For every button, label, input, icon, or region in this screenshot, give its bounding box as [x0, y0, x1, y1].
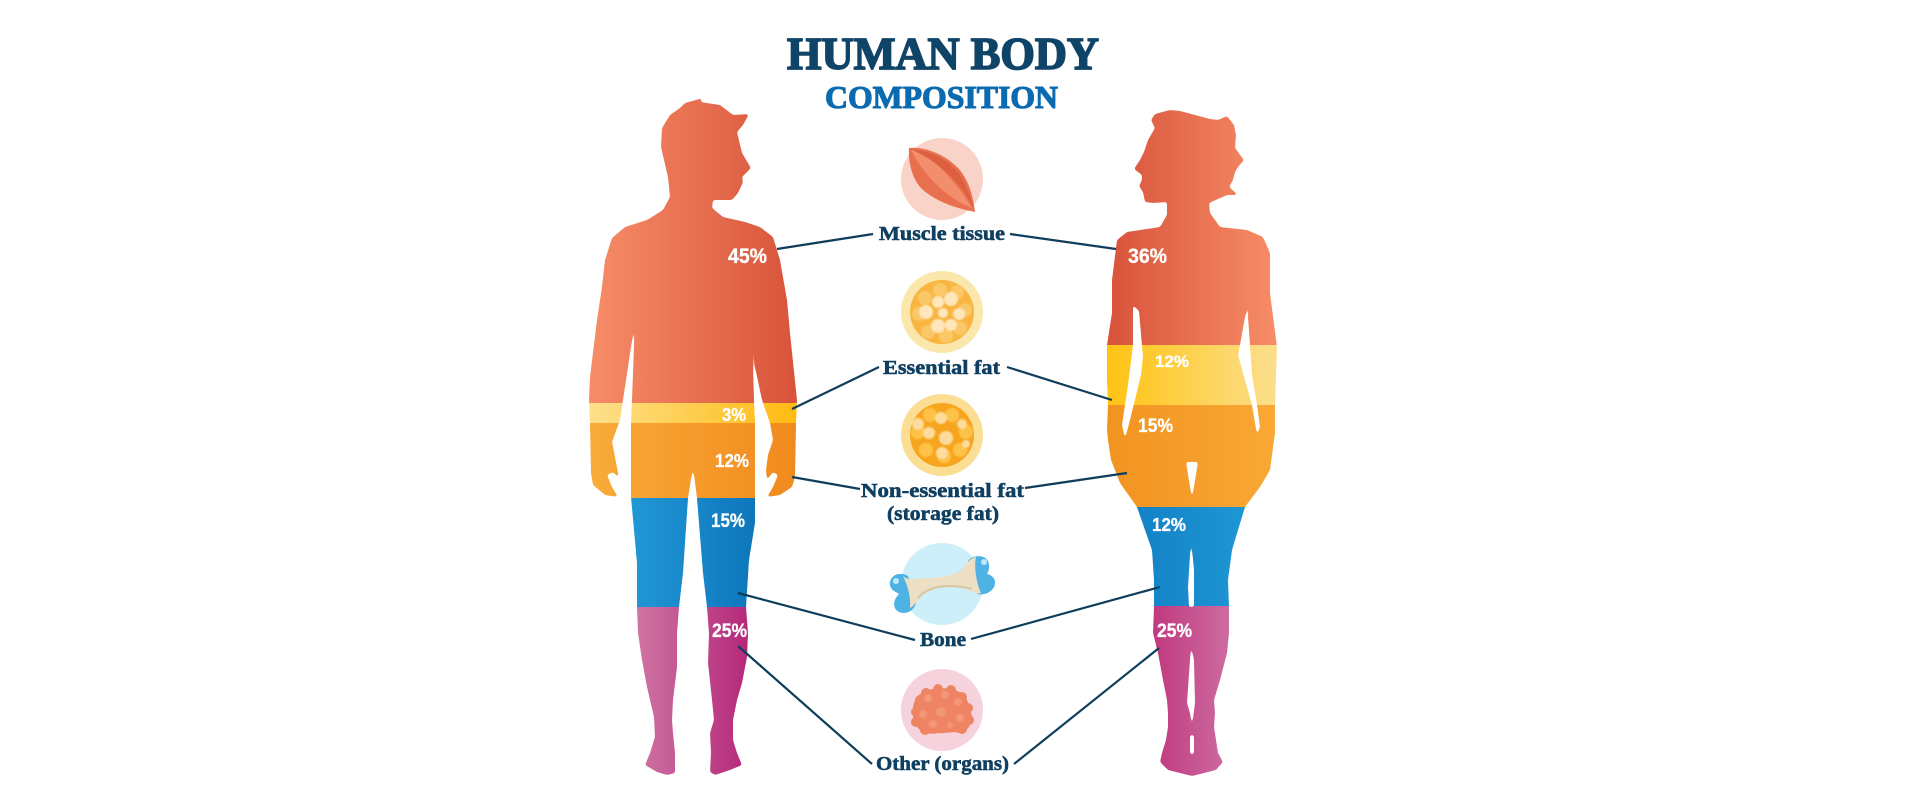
icon: non-essential fat cell	[901, 394, 983, 476]
connector lines	[738, 234, 1160, 764]
figure: man silhouette	[589, 99, 797, 775]
woman percentages	[1128, 245, 1192, 642]
man percentages: 15%	[711, 511, 745, 532]
label: muscle tissue: Muscle tissue	[879, 223, 1005, 245]
icon: muscle	[901, 138, 983, 220]
subtitle: COMPOSITION	[825, 79, 1058, 115]
label: essential fat: Essential fat	[883, 357, 1000, 379]
label: bone: Bone	[920, 629, 966, 651]
woman percentages: 12%	[1155, 352, 1189, 371]
icon: essential fat cell	[901, 271, 983, 353]
woman percentages: 36%	[1128, 245, 1167, 268]
woman percentages: 25%	[1157, 621, 1192, 642]
man percentages: 45%	[728, 245, 767, 268]
figure: woman silhouette	[1107, 110, 1277, 776]
man percentages: 12%	[715, 451, 749, 471]
title: HUMAN BODY	[787, 28, 1099, 79]
man percentages: 3%	[722, 405, 746, 425]
woman percentages: 12%	[1152, 515, 1186, 535]
man percentages	[711, 245, 767, 642]
man percentages: 25%	[712, 621, 747, 642]
icon: organ	[901, 669, 983, 751]
icon: bone	[890, 543, 995, 625]
label: other organs: Other (organs)	[876, 753, 1009, 775]
label: non-essential fat	[861, 480, 1024, 525]
woman percentages: 15%	[1138, 416, 1173, 437]
label: non-essential fat: (storage fat)	[887, 503, 999, 525]
label: non-essential fat: Non-essential fat	[861, 480, 1024, 502]
